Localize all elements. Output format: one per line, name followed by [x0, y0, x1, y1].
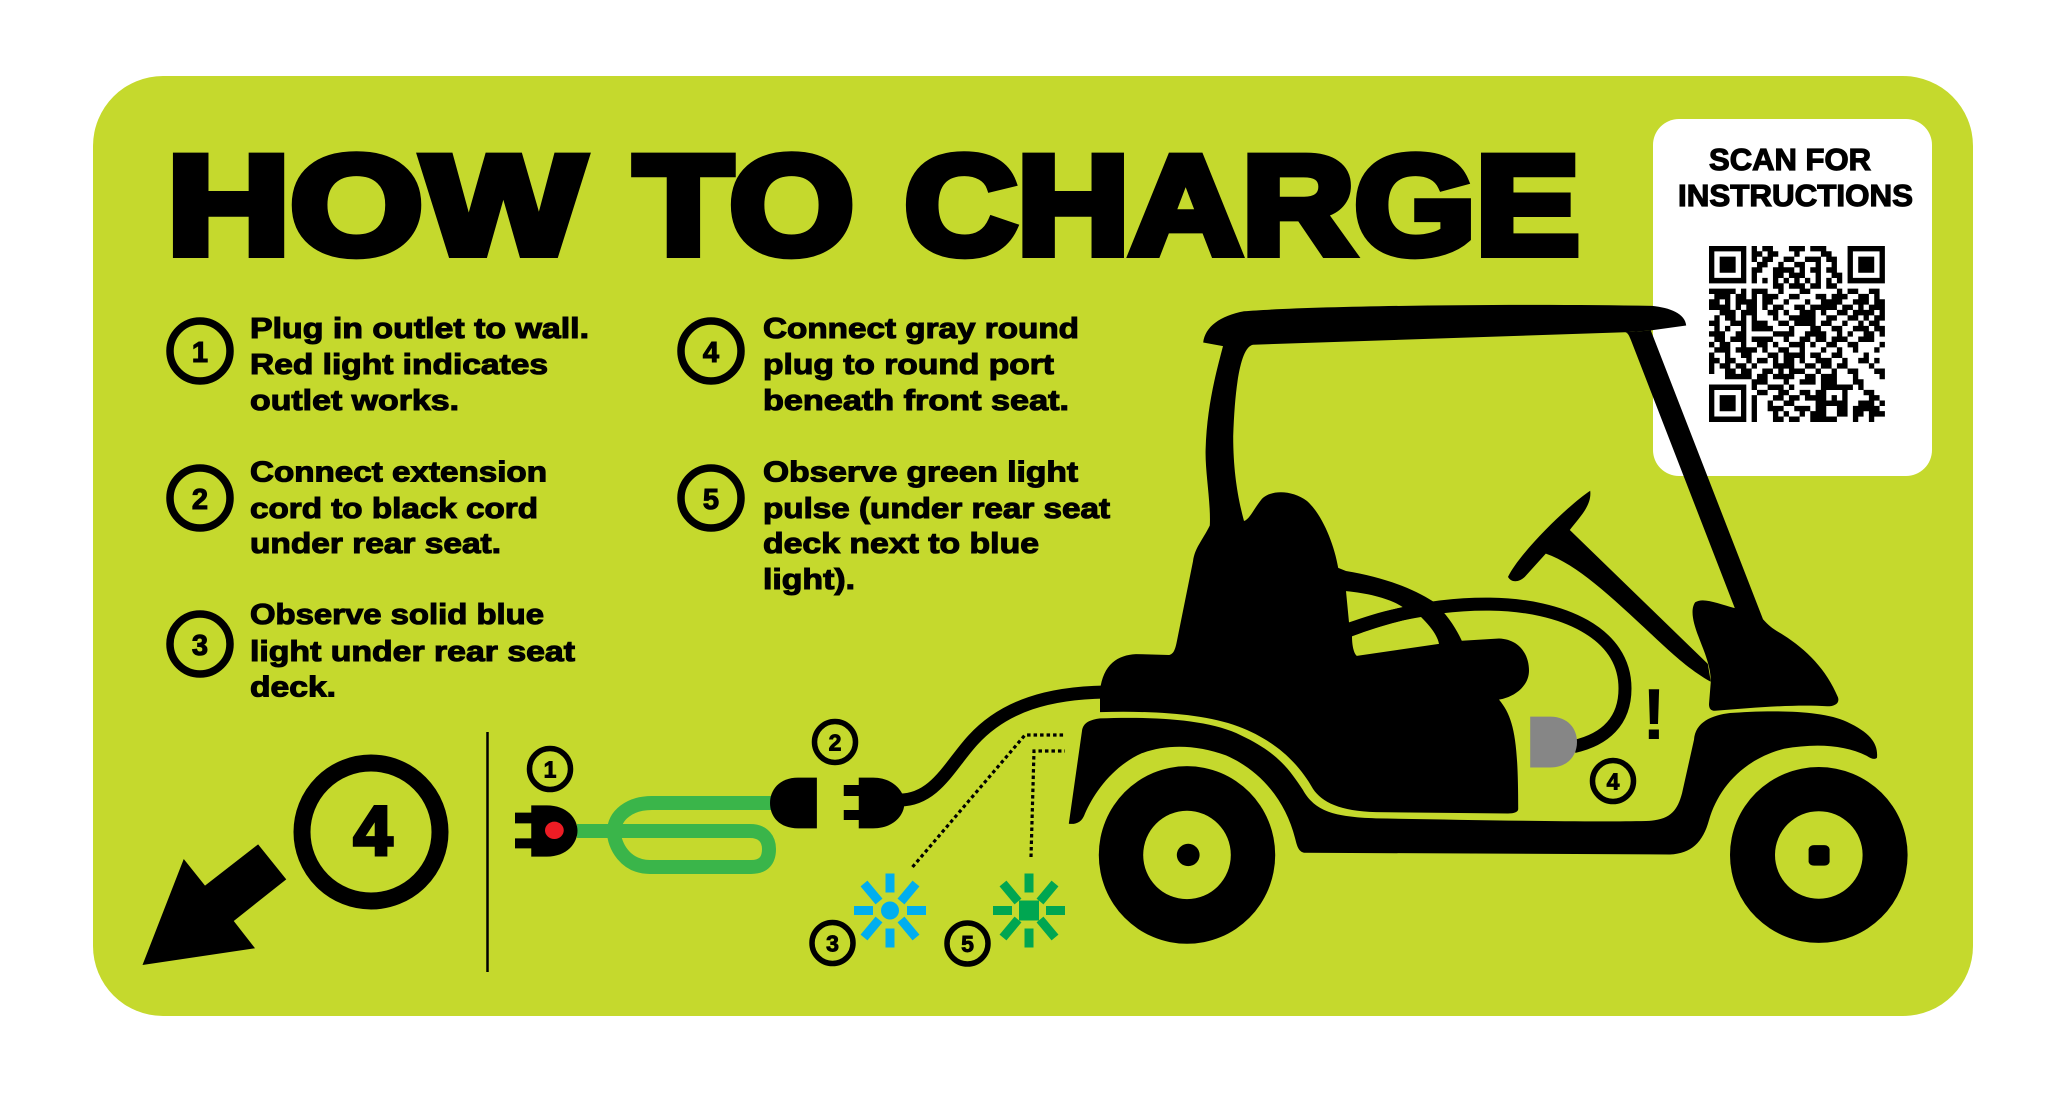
dotted leader: blue light	[912, 735, 1064, 867]
icon: cord socket	[770, 778, 817, 828]
panel: QR scan card	[1653, 119, 1932, 476]
small badge 2	[814, 722, 856, 762]
step 3	[170, 599, 575, 704]
divider	[486, 732, 489, 972]
front wheel	[1730, 767, 1908, 943]
big step 4 badge: 4	[354, 792, 393, 870]
step 1: Plug in outlet to wall.	[250, 313, 589, 345]
step 2: under rear seat.	[250, 528, 501, 560]
golf cart silhouette	[1069, 305, 1908, 944]
step 4: plug to round port	[763, 349, 1054, 381]
step 3: Observe solid blue	[250, 599, 544, 631]
exclamation mark: !	[1642, 675, 1666, 755]
small badge 5: 5	[961, 931, 974, 957]
small badge 1: 1	[544, 756, 557, 782]
heading: scan for instructions: SCAN FOR	[1709, 142, 1871, 177]
step 3: light under rear seat	[250, 636, 575, 668]
step 5	[681, 456, 1110, 596]
rear wheel	[1099, 766, 1275, 944]
heading: scan for instructions: INSTRUCTIONS	[1678, 178, 1913, 213]
step 2	[170, 456, 547, 560]
step 3: 3	[192, 630, 208, 662]
step 5: light).	[763, 564, 855, 596]
step 1: Red light indicates	[250, 349, 548, 381]
step 3: deck.	[250, 672, 336, 704]
step 4: beneath front seat.	[763, 385, 1069, 417]
small badge 1	[530, 748, 570, 790]
gray charging plug	[1530, 717, 1577, 767]
title: CHARGE	[904, 126, 1580, 284]
small badge 5	[947, 923, 988, 964]
steering wheel	[1508, 491, 1711, 682]
dotted leader: green light	[1031, 751, 1065, 857]
icon: wall plug with red light	[515, 805, 578, 857]
roof, rear pillar, seats	[1100, 305, 1686, 813]
step 4: 4	[703, 337, 719, 369]
step 5: deck next to blue	[763, 528, 1039, 560]
icon: green light burst	[993, 874, 1065, 948]
step 5: 5	[703, 484, 719, 516]
step 4: Connect gray round	[763, 313, 1079, 345]
step 2: cord to black cord	[250, 493, 538, 525]
heading: scan for instructions	[1678, 142, 1913, 213]
icon: blue light burst	[854, 874, 926, 948]
icon: black cord plug	[844, 778, 904, 828]
charging cable	[1349, 604, 1625, 746]
small badge 4: 4	[1607, 768, 1620, 794]
step 1: outlet works.	[250, 385, 459, 417]
black cord to cart	[900, 692, 1105, 800]
step 5: pulse (under rear seat	[763, 493, 1110, 525]
step 2: 2	[192, 484, 208, 516]
title: TO	[634, 126, 854, 284]
step 4	[681, 313, 1079, 417]
instructions list	[170, 313, 1110, 704]
title	[167, 126, 1580, 284]
step 2: Connect extension	[250, 456, 547, 488]
arrow: pointing down-left	[142, 844, 286, 965]
small badge 2: 2	[829, 730, 841, 756]
small badge 3: 3	[826, 930, 839, 956]
step 1	[170, 313, 589, 417]
chassis and fenders	[1069, 711, 1877, 855]
panel: lime background	[93, 76, 1973, 1016]
front pillar and dash	[1625, 330, 1838, 711]
small badge 4	[1592, 760, 1634, 802]
big step 4 badge	[302, 763, 440, 901]
title: HOW	[167, 126, 584, 284]
step 5: Observe green light	[763, 456, 1078, 488]
step 1: 1	[192, 337, 208, 369]
seat gaps	[1346, 591, 1439, 656]
QR code	[1709, 249, 1885, 419]
small badge 3	[812, 922, 853, 964]
extension cord: green	[577, 803, 775, 867]
